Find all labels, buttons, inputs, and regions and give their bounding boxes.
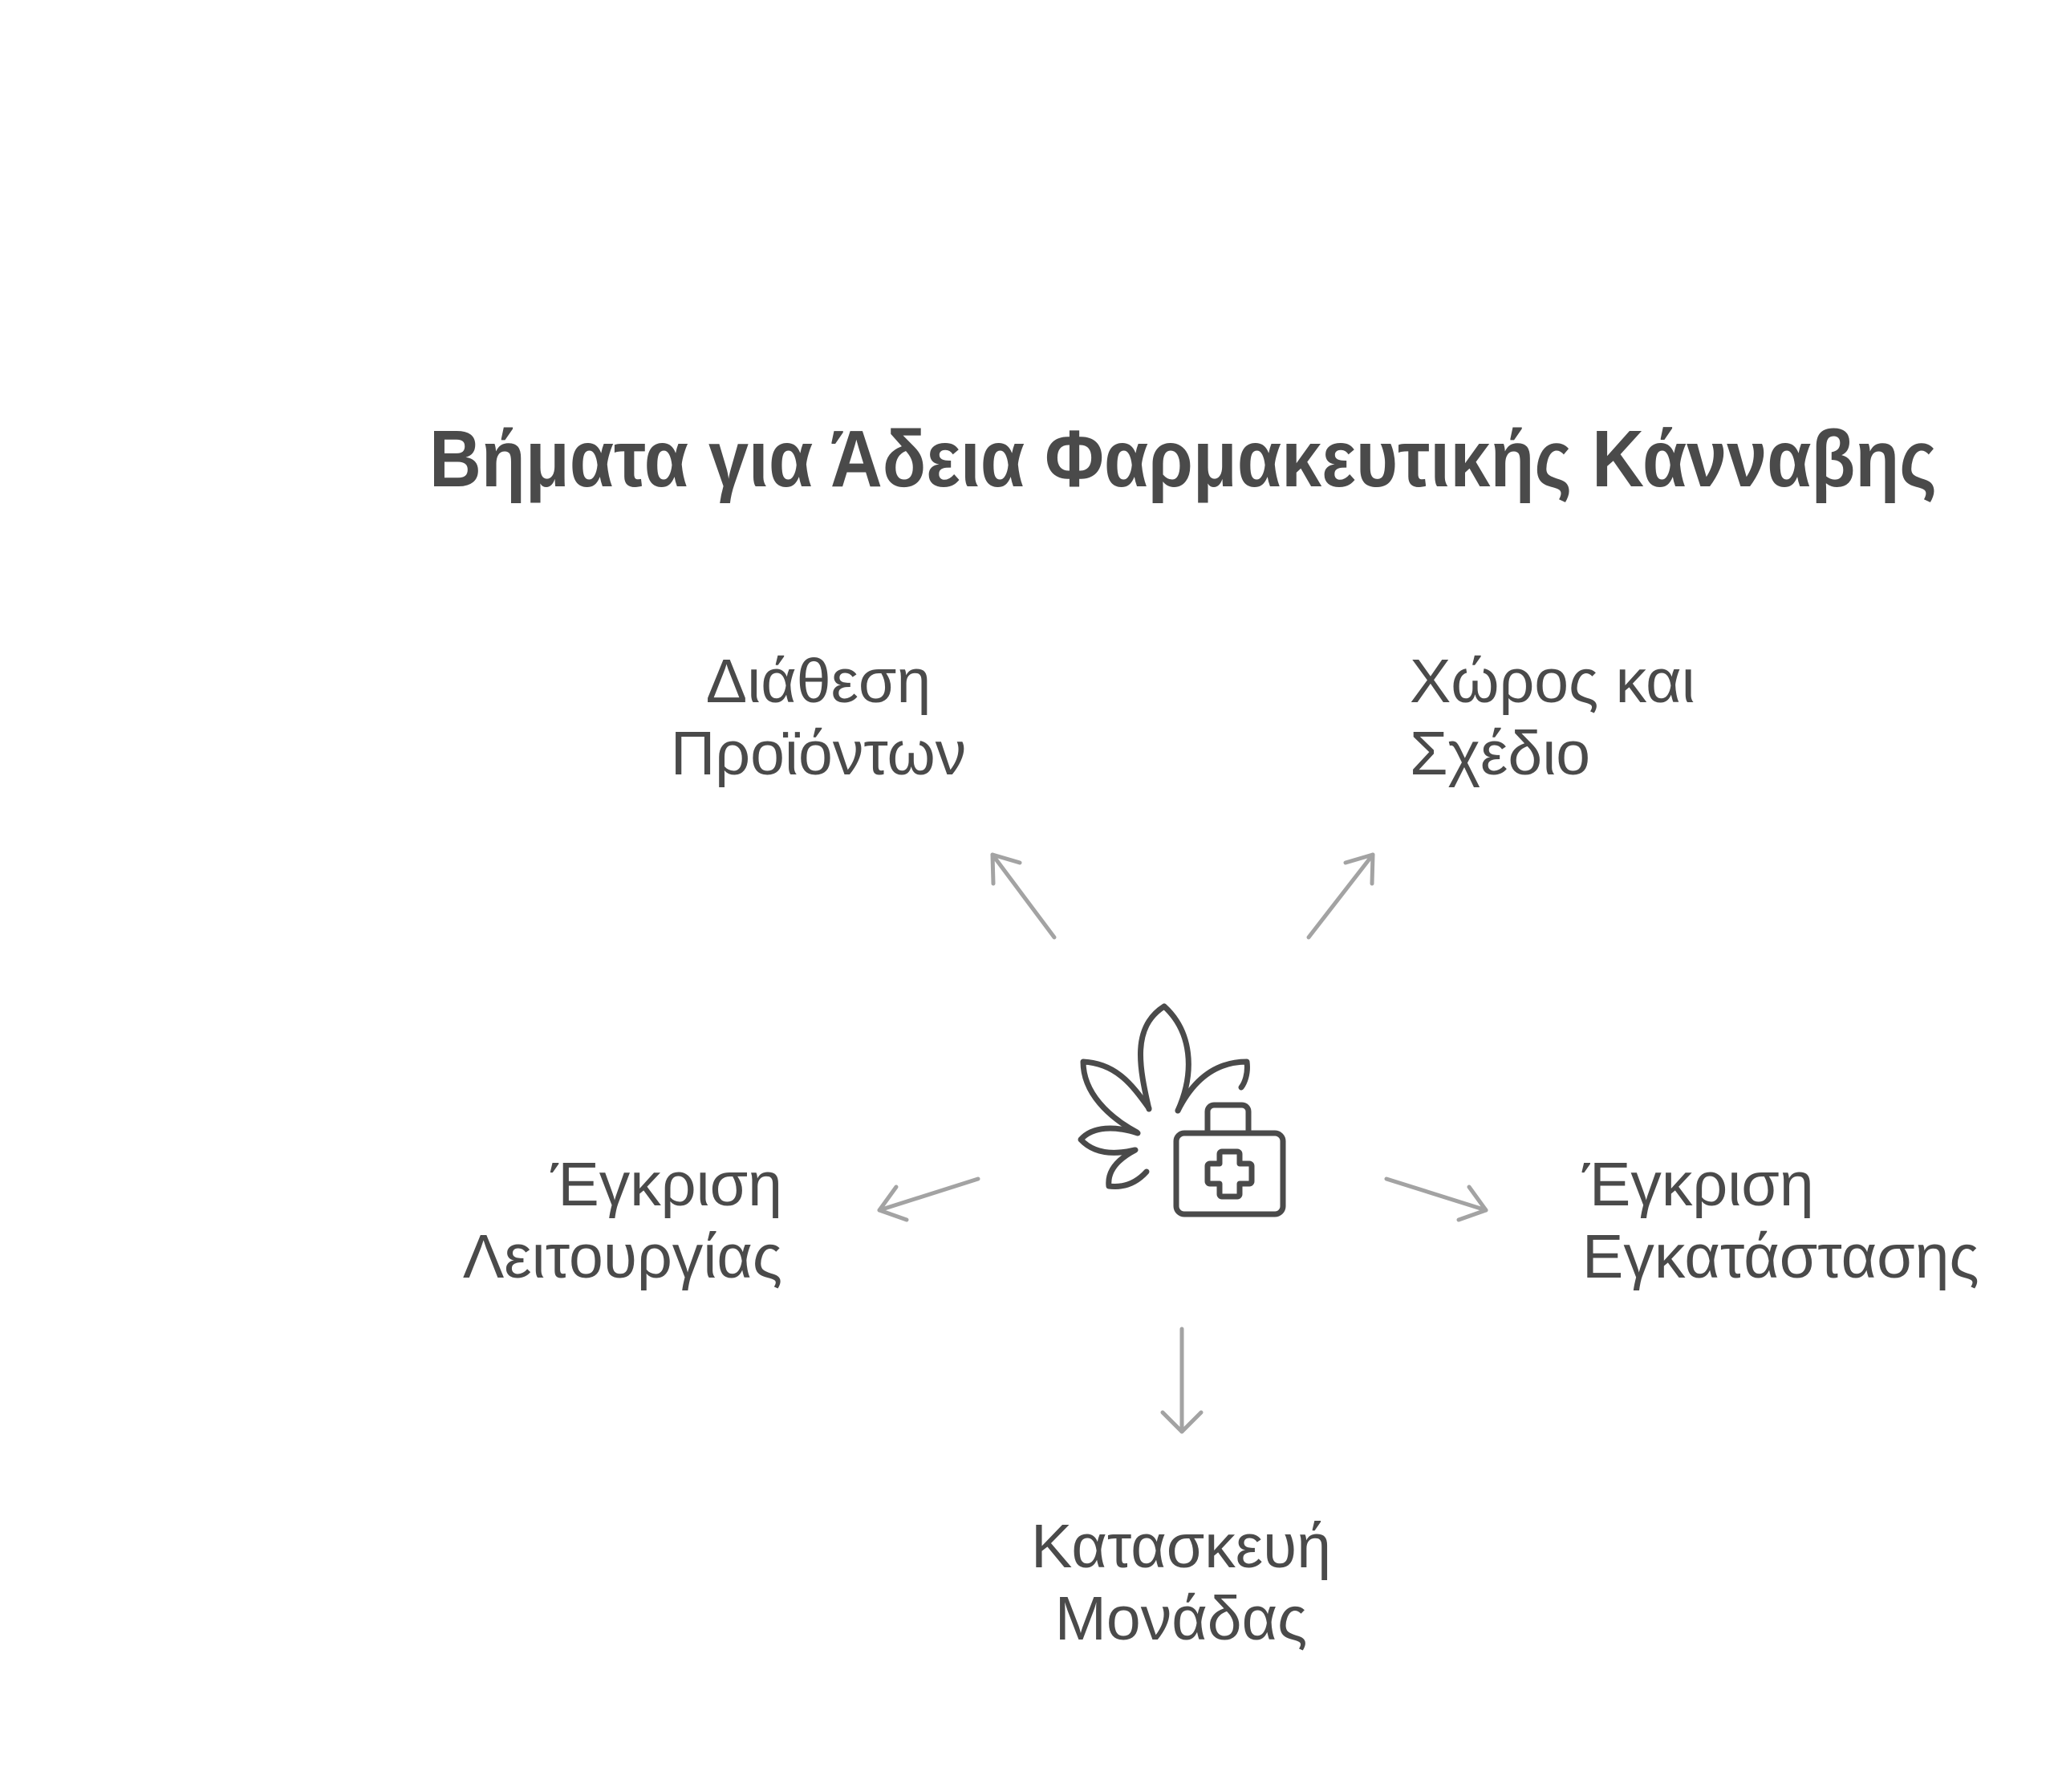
label: Χώρος και Σχέδιο: Σχέδιο bbox=[1410, 719, 1590, 788]
label: Κατασκευή Μονάδας: Κατασκευή bbox=[1031, 1512, 1331, 1581]
arrows bbox=[879, 855, 1486, 1432]
arrow: right bbox=[1386, 1179, 1486, 1220]
label: Διάθεση Προϊόντων: Προϊόντων bbox=[671, 719, 966, 788]
label: Έγκριση Εγκατάστασης: Εγκατάστασης bbox=[1582, 1222, 1979, 1291]
title: Βήματα για Άδεια Φαρμακευτικής Κάνναβης bbox=[429, 414, 1937, 504]
label: Έγκριση Εγκατάστασης: Έγκριση bbox=[1582, 1150, 1814, 1219]
label: Έγκριση Εγκατάστασης bbox=[1582, 1150, 1979, 1291]
label: Χώρος και Σχέδιο bbox=[1410, 647, 1695, 788]
arrow: up-left bbox=[992, 855, 1054, 937]
label: Διάθεση Προϊόντων bbox=[671, 647, 966, 788]
label: Έγκριση Λειτουργίας: Λειτουργίας bbox=[463, 1222, 782, 1291]
label: Έγκριση Λειτουργίας: Έγκριση bbox=[550, 1150, 782, 1219]
label: Κατασκευή Μονάδας bbox=[1031, 1512, 1331, 1653]
label: Χώρος και Σχέδιο: Χώρος και bbox=[1410, 647, 1695, 716]
arrow: up-right bbox=[1309, 855, 1373, 937]
arrow: left bbox=[879, 1179, 978, 1220]
label: Κατασκευή Μονάδας: Μονάδας bbox=[1055, 1584, 1307, 1653]
label: Έγκριση Λειτουργίας bbox=[463, 1150, 782, 1291]
arrow: down bbox=[1163, 1329, 1201, 1432]
label: Διάθεση Προϊόντων: Διάθεση bbox=[706, 647, 931, 716]
icon: cannabis leaf with medical kit bbox=[1081, 1006, 1283, 1214]
